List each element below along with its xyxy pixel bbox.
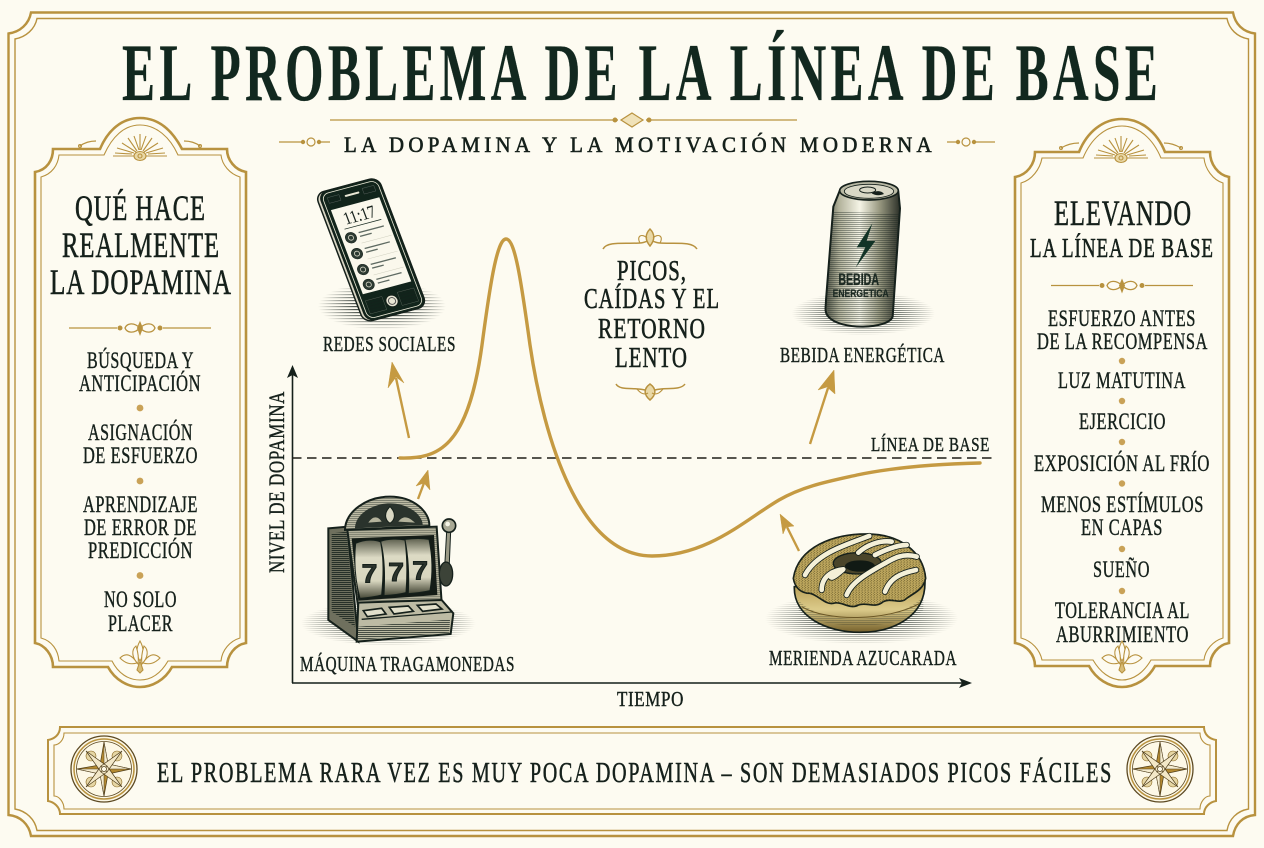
bullet bbox=[1119, 358, 1125, 364]
heading text: LENTO bbox=[615, 342, 688, 374]
heading: LA DOPAMINA bbox=[50, 262, 232, 302]
heading bbox=[50, 188, 232, 302]
list item: PLACER bbox=[108, 611, 173, 636]
list item: NO SOLO bbox=[104, 587, 177, 612]
heading: QUÉ HACE bbox=[75, 188, 206, 228]
list item: EN CAPAS bbox=[1081, 515, 1163, 540]
baseline label: LÍNEA DE BASE bbox=[871, 433, 990, 456]
list item: TOLERANCIA AL bbox=[1055, 598, 1190, 623]
list item bbox=[1037, 306, 1208, 354]
list item: ESFUERZO ANTES bbox=[1048, 306, 1196, 331]
divider ornament bbox=[69, 321, 211, 336]
list item: ASIGNACIÓN bbox=[88, 419, 193, 445]
arrow: to social media bbox=[388, 362, 409, 438]
center callout bbox=[584, 229, 720, 400]
banner: conclusion bbox=[48, 727, 1216, 814]
label: bebida energetica: BEBIDA ENERGÉTICA bbox=[780, 343, 945, 367]
icon: energy drink can bbox=[792, 181, 935, 335]
icon: energy drink can: ENERGETICA bbox=[833, 288, 889, 300]
bullet bbox=[1119, 546, 1125, 552]
heading text: RETORNO bbox=[598, 313, 706, 345]
heading text bbox=[584, 255, 720, 374]
icon: compass left bbox=[71, 736, 137, 802]
label: redes sociales: REDES SOCIALES bbox=[323, 332, 456, 356]
heading text: CAÍDAS Y EL bbox=[584, 282, 720, 315]
icon: sunburst bbox=[1094, 136, 1148, 162]
list item: BÚSQUEDA Y bbox=[87, 347, 194, 373]
icon: bottom fleuron bbox=[1102, 641, 1142, 673]
arrow: from slot machine bbox=[416, 470, 430, 499]
dopamine curve line bbox=[400, 239, 980, 556]
subtitle right ornament bbox=[947, 138, 995, 146]
list item: EJERCICIO bbox=[1079, 409, 1166, 434]
y axis bbox=[287, 365, 298, 683]
list item bbox=[83, 492, 198, 563]
subtitle: LA DOPAMINA Y LA MOTIVACIÓN MODERNA bbox=[344, 132, 936, 157]
subtitle left ornament bbox=[279, 138, 330, 146]
icon: energy drink can: BEBIDA bbox=[838, 270, 879, 289]
list item: APRENDIZAJE bbox=[83, 492, 198, 517]
ornament top bbox=[603, 229, 697, 249]
x axis bbox=[292, 678, 972, 688]
icon: glazed donut bbox=[765, 534, 958, 644]
icon: compass right bbox=[1127, 736, 1193, 802]
icon: smartphone: 11:17 bbox=[340, 201, 378, 228]
ornament bottom bbox=[616, 384, 685, 400]
list item: ANTICIPACIÓN bbox=[79, 370, 201, 396]
list item bbox=[104, 587, 177, 636]
panel: que hace realmente la dopamina bbox=[35, 118, 246, 687]
list item: PREDICCIÓN bbox=[88, 537, 193, 563]
arrow: from sugary snack bbox=[780, 514, 799, 551]
chart: dopamine curve bbox=[264, 239, 996, 711]
bullet bbox=[1119, 480, 1125, 487]
icon: slot machine: 7 bbox=[412, 555, 428, 585]
panel: elevando la linea de base bbox=[1015, 119, 1229, 687]
icon: bottom fleuron bbox=[120, 641, 160, 673]
divider ornament bbox=[1051, 278, 1193, 294]
icon: slot machine: 7 bbox=[388, 557, 404, 587]
icon: top scrolls bbox=[79, 141, 201, 147]
arrow: to energy drink bbox=[810, 370, 835, 444]
heading text: PICOS, bbox=[617, 255, 687, 287]
list item: DE ERROR DE bbox=[84, 515, 197, 540]
list item: SUEÑO bbox=[1093, 557, 1150, 582]
heading: REALMENTE bbox=[62, 225, 220, 265]
icon: sunburst bbox=[113, 134, 167, 160]
x axis label: TIEMPO bbox=[617, 687, 684, 711]
bullet bbox=[1119, 588, 1125, 594]
list item bbox=[1055, 598, 1190, 647]
label: maquina tragamonedas: MÁQUINA TRAGAMONEDAS bbox=[300, 652, 515, 676]
icon: top scrolls bbox=[1060, 143, 1182, 149]
y axis label: NIVEL DE DOPAMINA bbox=[264, 391, 289, 573]
bullet bbox=[137, 405, 143, 411]
icon: slot machine bbox=[301, 497, 476, 646]
heading bbox=[1030, 193, 1214, 263]
label: merienda azucarada: MERIENDA AZUCARADA bbox=[769, 646, 957, 670]
list item: LUZ MATUTINA bbox=[1058, 368, 1186, 393]
title rule bbox=[330, 113, 797, 127]
bullet bbox=[137, 572, 143, 579]
list item: DE ESFUERZO bbox=[83, 443, 198, 468]
list item bbox=[1041, 492, 1204, 540]
icon: slot machine: 7 bbox=[362, 558, 377, 588]
bullet bbox=[1119, 439, 1125, 445]
list item bbox=[79, 347, 201, 396]
icon: smartphone bbox=[315, 177, 446, 330]
list item bbox=[83, 419, 198, 468]
heading: ELEVANDO bbox=[1054, 193, 1192, 233]
bullet bbox=[137, 478, 143, 484]
bullet bbox=[1119, 398, 1125, 404]
list item: ABURRIMIENTO bbox=[1056, 622, 1189, 647]
baseline dashed line bbox=[292, 457, 996, 459]
list item: MENOS ESTÍMULOS bbox=[1041, 492, 1204, 517]
